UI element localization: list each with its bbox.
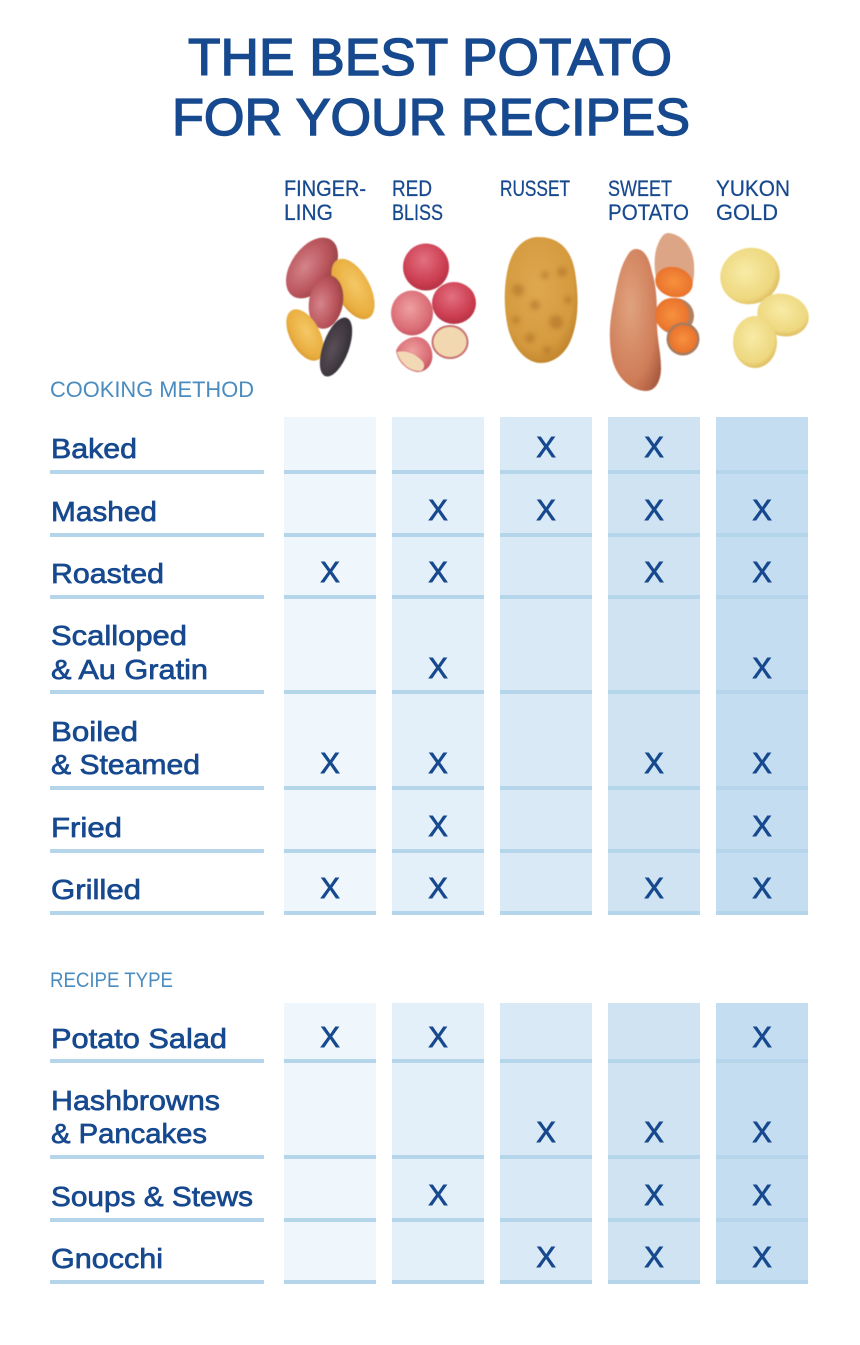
column heading: red bliss: BLISS [392, 200, 443, 225]
row: boiled and steamed: & Steamed [51, 749, 200, 780]
row: scalloped and au gratin: X [428, 653, 448, 685]
panel: cooking method column shading [284, 417, 808, 915]
row: roasted [50, 557, 808, 597]
title: FOR YOUR RECIPES [172, 89, 690, 147]
column heading: fingerling: FINGER- [284, 176, 366, 201]
row: roasted: X [644, 557, 664, 589]
heading: cooking method: COOKING METHOD [50, 377, 254, 402]
title: THE BEST POTATO [188, 29, 672, 87]
column heading: yukon gold: YUKON [716, 176, 790, 201]
row: hashbrowns and pancakes [50, 1085, 808, 1157]
row: hashbrowns and pancakes: X [536, 1117, 556, 1149]
row: mashed: X [752, 495, 772, 527]
icon: russet potato [505, 237, 578, 363]
row: baked: X [644, 432, 664, 464]
column heading: sweet potato: SWEET [608, 176, 672, 201]
row: scalloped and au gratin [50, 620, 808, 692]
row: boiled and steamed: X [752, 748, 772, 780]
row: roasted: Roasted [51, 558, 164, 589]
icon: fingerling potatoes [275, 228, 384, 381]
row: scalloped and au gratin: Scalloped [51, 620, 187, 651]
row: baked: Baked [51, 433, 137, 464]
row: fried: X [428, 811, 448, 843]
column heading: yukon gold: GOLD [716, 200, 778, 225]
row: fried: Fried [51, 812, 122, 843]
row: grilled: X [320, 873, 340, 905]
row: baked: X [536, 432, 556, 464]
row: potato salad: X [320, 1022, 340, 1054]
row: potato salad [50, 1022, 808, 1061]
row: potato salad: X [428, 1022, 448, 1054]
row: grilled: X [644, 873, 664, 905]
row: grilled: X [428, 873, 448, 905]
icon: sweet potatoes [610, 233, 700, 391]
row: gnocchi: X [644, 1242, 664, 1274]
row: boiled and steamed: Boiled [51, 716, 138, 747]
row: boiled and steamed: X [320, 748, 340, 780]
row: roasted: X [752, 557, 772, 589]
row: gnocchi: X [536, 1242, 556, 1274]
row: gnocchi: Gnocchi [51, 1243, 163, 1274]
row: baked [50, 432, 808, 472]
row: potato salad: X [752, 1022, 772, 1054]
column heading: red bliss [392, 176, 443, 225]
row: fried: X [752, 811, 772, 843]
row: roasted: X [428, 557, 448, 589]
row: scalloped and au gratin: X [752, 653, 772, 685]
row: soups and stews: Soups & Stews [51, 1181, 253, 1212]
row: grilled: X [752, 873, 772, 905]
row: soups and stews: X [752, 1180, 772, 1212]
column heading: yukon gold [716, 176, 790, 225]
row: mashed: X [536, 495, 556, 527]
title [172, 29, 690, 147]
row: mashed: X [428, 495, 448, 527]
icon: red bliss potatoes [391, 244, 476, 372]
row: roasted: X [320, 557, 340, 589]
row: boiled and steamed [50, 716, 808, 788]
icon: yukon gold potatoes [712, 239, 814, 368]
heading: recipe type: RECIPE TYPE [50, 969, 173, 992]
row: grilled: Grilled [51, 874, 141, 905]
column heading: sweet potato: POTATO [608, 200, 689, 225]
row: mashed: Mashed [51, 496, 157, 527]
row: mashed [50, 495, 808, 535]
row: mashed: X [644, 495, 664, 527]
column heading: red bliss: RED [392, 176, 432, 201]
row: grilled [50, 873, 808, 913]
column heading: russet: RUSSET [500, 176, 570, 201]
row: scalloped and au gratin: & Au Gratin [51, 654, 208, 685]
row: soups and stews: X [428, 1180, 448, 1212]
row: fried [50, 811, 808, 851]
column heading: fingerling: LING [284, 200, 333, 225]
column heading: sweet potato [608, 176, 689, 225]
row: potato salad: Potato Salad [51, 1023, 227, 1054]
row: gnocchi: X [752, 1242, 772, 1274]
row: boiled and steamed: X [644, 748, 664, 780]
row: gnocchi [50, 1242, 808, 1282]
row: soups and stews: X [644, 1180, 664, 1212]
row: hashbrowns and pancakes: Hashbrowns [51, 1085, 220, 1116]
row: hashbrowns and pancakes: X [644, 1117, 664, 1149]
panel: recipe type column shading [284, 1003, 808, 1284]
column heading: fingerling [284, 176, 366, 225]
row: soups and stews [50, 1180, 808, 1220]
row: hashbrowns and pancakes: X [752, 1117, 772, 1149]
row: hashbrowns and pancakes: & Pancakes [51, 1118, 207, 1149]
row: boiled and steamed: X [428, 748, 448, 780]
